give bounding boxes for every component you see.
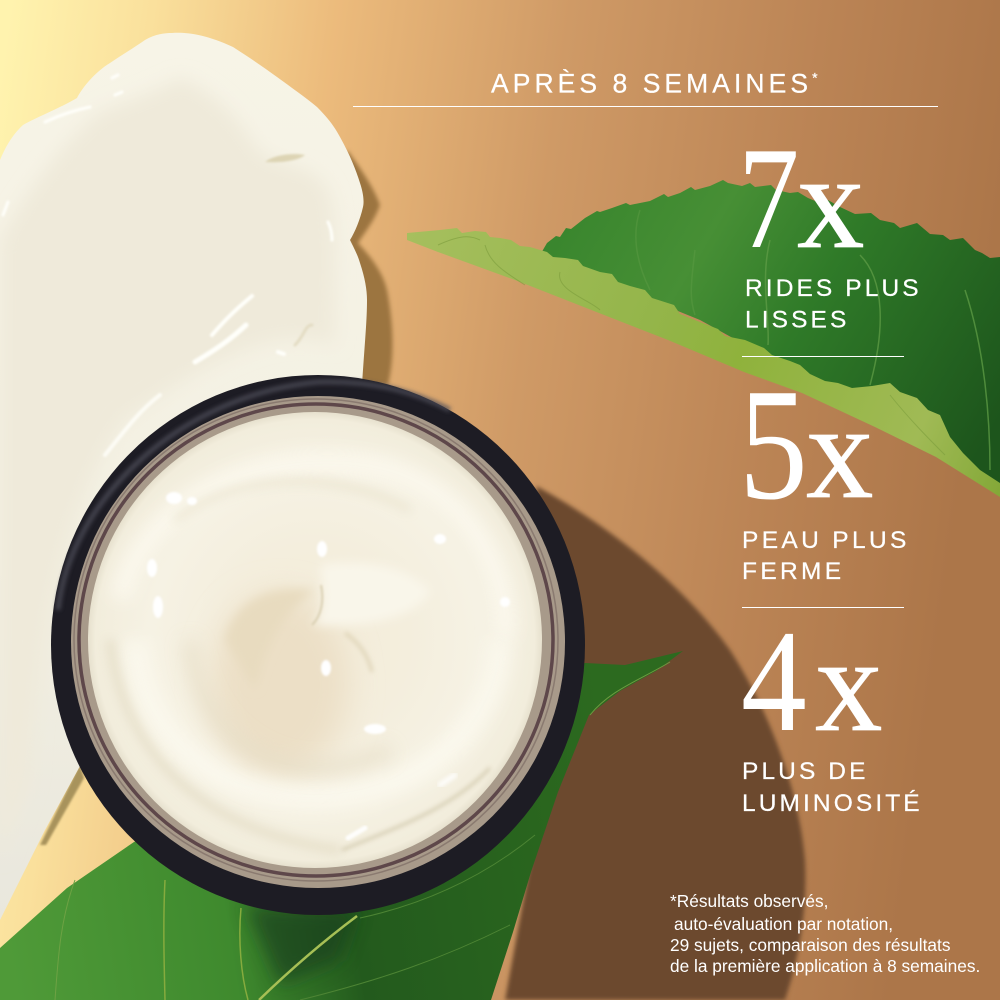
stat: 5x bbox=[739, 356, 910, 585]
heading: * bbox=[812, 70, 822, 86]
smear lower edge shadow bbox=[40, 764, 84, 845]
leaf midrib and veins bbox=[55, 662, 670, 1000]
jar cast shadow bbox=[505, 486, 805, 1000]
stat: 7x: RIDES PLUS bbox=[745, 275, 922, 302]
heading rule bbox=[353, 106, 938, 107]
central dimple bbox=[212, 595, 348, 775]
stat: 4x: x bbox=[815, 611, 882, 760]
swirl shade bbox=[190, 640, 390, 768]
cream smear bbox=[0, 33, 367, 920]
heading: APRÈS 8 SEMAINES bbox=[491, 68, 812, 98]
jar bbox=[51, 375, 585, 915]
footnote: de la première application à 8 semaines. bbox=[670, 956, 980, 976]
jar cream bbox=[88, 412, 542, 868]
smear flat interior bbox=[0, 78, 335, 860]
stat: 4x: LUMINOSITÉ bbox=[742, 790, 923, 817]
smear crease bbox=[265, 154, 305, 162]
jar rim highlight bbox=[58, 382, 450, 610]
stat: 7x bbox=[738, 118, 922, 334]
smear gloss highlights bbox=[3, 75, 332, 455]
stat: 4x: 4 bbox=[741, 601, 807, 763]
stat: 5x: x bbox=[806, 378, 874, 527]
stat: 7x: x bbox=[797, 128, 864, 277]
footnote: auto-évaluation par notation, bbox=[674, 914, 893, 934]
lower bright arc bbox=[135, 640, 500, 796]
bottom leaf bbox=[0, 651, 683, 1000]
jar outer rim bbox=[51, 375, 585, 915]
leaf light half veins bbox=[438, 237, 945, 455]
heading bbox=[353, 68, 938, 107]
footnote: *Résultats observés, bbox=[670, 891, 828, 911]
smear cast shadow bbox=[330, 150, 392, 385]
footnote: 29 sujets, comparaison des résultats bbox=[670, 935, 951, 955]
stat: 4x: PLUS DE bbox=[742, 758, 869, 785]
leaf light half bbox=[407, 228, 1000, 497]
swirl fold bbox=[312, 563, 430, 626]
footnote bbox=[670, 891, 980, 976]
stat: 7x: LISSES bbox=[745, 306, 849, 334]
stat: 5x: PEAU PLUS bbox=[742, 527, 910, 554]
lower crease bbox=[342, 768, 490, 850]
stat: 5x: 5 bbox=[739, 356, 808, 533]
cream swirl bbox=[110, 462, 510, 850]
leaf dark half bbox=[540, 180, 1000, 490]
leaf shadow under jar bbox=[245, 905, 357, 985]
stat: 5x: FERME bbox=[742, 558, 844, 585]
stat: 4x bbox=[741, 601, 923, 817]
stat: 7x: 7 bbox=[738, 118, 799, 279]
upper bright arc bbox=[120, 462, 505, 640]
upper right leaf bbox=[407, 180, 1000, 497]
cream gloss highlights bbox=[147, 492, 510, 734]
leaf dark half veins bbox=[636, 210, 990, 470]
jar inner ring bbox=[71, 396, 565, 888]
